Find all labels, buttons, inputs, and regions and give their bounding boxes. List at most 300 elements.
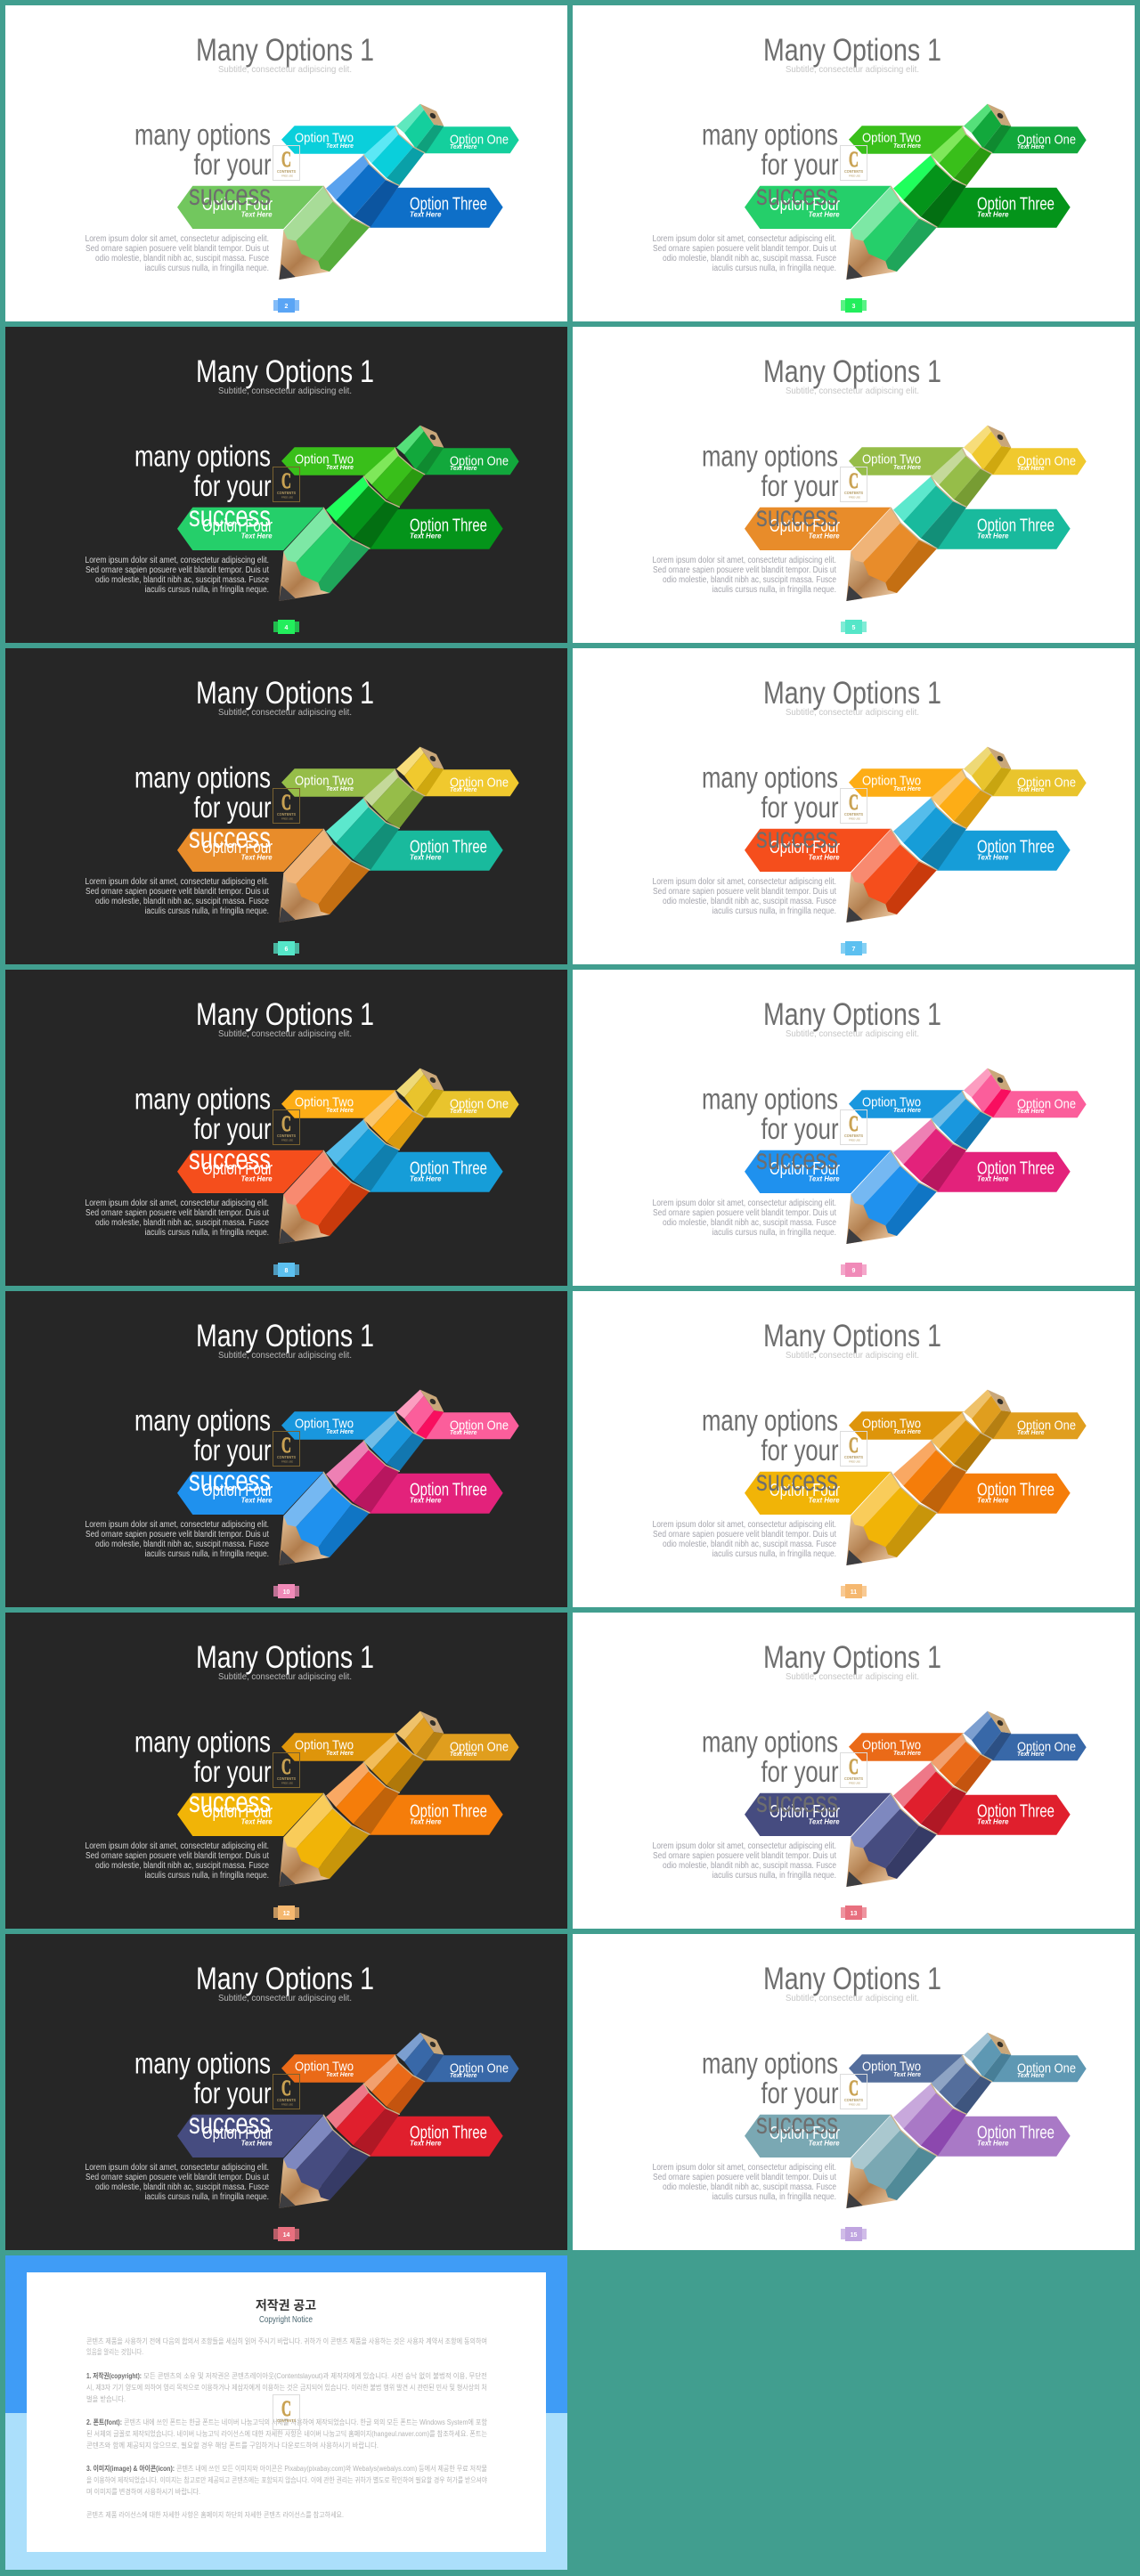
ribbon: option three: Text Here [977,210,1009,219]
ribbon: option four: Text Here [241,1174,273,1183]
ribbon: option three [935,831,1071,871]
section 2: font: 콘텐츠와 함께 제공되지 않으므로, 필요할 경우 해당 폰트를 구입하거나 다운로드하여 사용하시기 바랍니다. [86,2441,379,2450]
ribbon: option two: Text Here [893,1751,921,1757]
heading: for your [194,2076,272,2109]
heading: success [189,178,271,211]
ribbon: option three: Text Here [410,2139,442,2148]
ribbon: option four: Option Four [770,516,840,536]
ribbon: option four: Text Here [241,532,273,540]
page number [273,1906,299,1920]
heading: success [756,178,838,211]
page number [273,298,299,313]
heading: many options [134,1726,271,1758]
section 3: image and icon: 며 이미지를 변경하여 사용하시기 바랍니다. [86,2487,200,2496]
pencil [279,1069,444,1244]
ribbon: option four: Option Four [202,1481,273,1500]
body text: odio molestie, blandit nibh ac, suscipit massa. Fusce [95,1540,269,1549]
ribbon: option four: Text Here [809,2139,840,2148]
heading [702,2046,839,2140]
subtitle: Subtitle, consectetur adipiscing elit. [786,64,919,75]
page number [841,941,867,955]
ribbon: option one [990,1412,1087,1439]
ribbon: option one [423,769,519,796]
watermark [273,1432,299,1466]
body text: Lorem ipsum dolor sit amet, consectetur adipiscing elit. [652,234,836,244]
ribbon: option one: Option One [1017,453,1076,468]
slide 8 [5,970,567,1286]
subtitle: Subtitle, consectetur adipiscing elit. [786,1671,919,1682]
copyright title: 저작권 공고 [256,2298,316,2312]
ribbon: option one: Text Here [450,787,477,793]
slide 15 [573,1934,1135,2250]
ribbon: option two [281,447,396,475]
slide 9 [573,970,1135,1286]
heading: for your [194,469,272,502]
heading [702,760,839,854]
heading [134,1726,272,1818]
ribbon: option four: Text Here [241,210,273,219]
heading: many options [702,440,838,472]
ribbon: option three: Option Three [410,2124,487,2143]
pencil [846,1390,1011,1565]
heading: success [189,500,271,532]
ribbon: option one [423,2055,519,2082]
body text: Lorem ipsum dolor sit amet, consectetur adipiscing elit. [86,2163,269,2173]
subtitle: Subtitle, consectetur adipiscing elit. [218,1993,352,2003]
ribbon: option three: Text Here [410,1174,442,1183]
body text [86,556,269,595]
body text [652,556,836,595]
slide 2 [5,5,567,321]
body text [652,877,836,916]
subtitle: Subtitle, consectetur adipiscing elit. [218,64,352,75]
pencil [279,426,444,601]
intro paragraph: 있음을 알리는 것입니다. [86,2347,143,2356]
title: Many Options 1 [196,354,374,389]
body text [86,1199,269,1238]
ribbon: option one: Option One [1017,1418,1076,1433]
ribbon: option three [368,1152,503,1192]
watermark: C [281,1112,291,1136]
ribbon: option four: Option Four [202,1159,273,1179]
heading: many options [702,760,838,794]
ribbon: option two: Option Two [295,130,354,146]
ribbon: option one: Option One [1017,775,1076,790]
ribbon: option three: Option Three [977,2124,1054,2143]
heading [134,1083,272,1175]
heading [702,1726,839,1818]
ribbon: option two: Option Two [295,2059,354,2075]
watermark [841,467,867,502]
heading: many options [134,118,271,151]
page number [273,941,299,955]
body text: iaculis cursus nulla, in fringilla neque. [712,264,836,273]
page number: 12 [283,1911,289,1917]
watermark [273,1752,299,1788]
watermark [841,2075,867,2109]
page number: 5 [852,625,856,631]
ribbon: option two [281,768,396,797]
body text [86,877,269,916]
white card [27,2272,546,2552]
heading: for your [194,1434,272,1467]
ribbon: option two [849,1411,964,1440]
subtitle: Subtitle, consectetur adipiscing elit. [218,1671,352,1682]
pencil [846,1711,1011,1887]
ribbon: option four: Option Four [770,838,840,857]
watermark: CONTENTS [277,1455,296,1459]
ribbon: option three: Text Here [977,1817,1009,1826]
page number [841,1584,867,1598]
ribbon: option three: Option Three [410,838,487,857]
watermark [841,1432,867,1466]
title: Many Options 1 [196,1640,374,1675]
body text: iaculis cursus nulla, in fringilla neque. [712,585,836,595]
ribbon: option one [423,448,519,475]
heading: success [189,2107,271,2140]
pencil [846,1069,1011,1244]
watermark: FREE USE [281,1460,293,1464]
ribbon: option two [281,1090,396,1118]
title: Many Options 1 [763,676,941,711]
ribbon: option three: Text Here [410,1817,442,1826]
ribbon: option one: Text Here [1017,466,1045,472]
body text: odio molestie, blandit nibh ac, suscipit massa. Fusce [95,254,269,264]
page number [273,1584,299,1598]
heading: many options [134,440,271,472]
section 2: font [86,2418,488,2450]
heading: for your [761,1755,839,1788]
ribbon: option two: Text Here [893,1108,921,1114]
heading: many options [134,2046,271,2080]
ribbon: option four [177,508,323,550]
section 1: copyright [86,2371,487,2403]
body text: iaculis cursus nulla, in fringilla neque. [144,2192,269,2202]
ribbon: option four: Text Here [809,210,840,219]
ribbon: option four: Text Here [241,1817,273,1826]
body text: iaculis cursus nulla, in fringilla neque. [712,1871,836,1881]
body text: Lorem ipsum dolor sit amet, consectetur adipiscing elit. [86,556,269,565]
ribbon: option one: Option One [450,132,509,147]
watermark: FREE USE [281,2103,293,2107]
ribbon: option four: Text Here [809,1174,840,1183]
ribbon: option one: Text Here [450,466,477,472]
heading: for your [761,2076,839,2109]
slide 3 [573,5,1135,321]
ribbon: option one: Text Here [450,144,477,150]
page number [841,1906,867,1920]
ribbon: option two [849,126,964,154]
ribbon: option three [935,1474,1071,1514]
ribbon: option two: Option Two [862,1416,921,1432]
body text [652,234,836,273]
ribbon: option three [368,509,503,549]
page number: 13 [851,1911,857,1917]
title: Many Options 1 [763,1962,941,1996]
ribbon: option four: Text Here [241,853,273,862]
page number: 7 [852,947,856,953]
subtitle: Subtitle, consectetur adipiscing elit. [786,1350,919,1361]
ribbon: option one: Text Here [450,1751,477,1758]
body text: odio molestie, blandit nibh ac, suscipit massa. Fusce [663,2182,836,2192]
page number: 8 [285,1268,289,1274]
ribbon: option four: Option Four [770,1802,840,1822]
ribbon: option two [849,2054,964,2083]
pencil [279,104,444,280]
watermark: C [849,1112,859,1136]
body text: iaculis cursus nulla, in fringilla neque. [144,1549,269,1559]
ribbon: option four: Option Four [770,195,840,215]
watermark [273,2075,299,2109]
ribbon: option two: Option Two [862,130,921,146]
slide 10 [5,1291,567,1607]
watermark [273,1109,299,1145]
ribbon: option two: Text Here [893,143,921,150]
watermark: C [849,1755,859,1779]
ribbon: option two: Option Two [295,773,354,789]
body text: iaculis cursus nulla, in fringilla neque. [144,585,269,595]
body text: Sed ornare sapien posuere velit blandit tempor. Duis ut [86,1530,269,1540]
ribbon: option three: Text Here [410,1496,442,1505]
section 3: image and icon: 3. 이미지(image) & 아이콘(icon): [86,2464,175,2473]
ribbon: option one: Option One [450,453,509,468]
watermark: C [849,469,859,493]
ribbon: option one [990,448,1087,475]
ribbon: option three: Option Three [977,1802,1054,1822]
body text: Sed ornare sapien posuere velit blandit tempor. Duis ut [86,887,269,897]
ribbon: option four [177,2115,323,2158]
ribbon: option three: Text Here [977,1174,1009,1183]
heading: for your [194,791,272,824]
page number [273,620,299,634]
watermark [273,146,299,180]
heading: for your [194,148,272,181]
ribbon: option four [745,1472,891,1515]
ribbon: option four [745,1793,891,1836]
ribbon: option two [849,1733,964,1761]
ribbon: option two: Text Here [893,465,921,471]
ribbon: option two: Text Here [893,786,921,792]
subtitle: Subtitle, consectetur adipiscing elit. [218,707,352,718]
heading: for your [761,1112,839,1145]
ribbon: option three: Option Three [410,516,487,536]
ribbon: option one: Option One [450,1739,509,1754]
heading: for your [761,1434,839,1467]
ribbon: option one: Option One [450,1096,509,1111]
watermark: C [849,2076,859,2101]
ribbon: option four [745,186,891,229]
body text: Lorem ipsum dolor sit amet, consectetur adipiscing elit. [652,2163,836,2173]
watermark: FREE USE [849,817,860,821]
section 1: copyright: 벌을 받습니다. [86,2394,126,2403]
ribbon: option four [177,1150,323,1193]
body text: Sed ornare sapien posuere velit blandit tempor. Duis ut [86,2173,269,2182]
heading: many options [702,118,838,151]
subtitle: Subtitle, consectetur adipiscing elit. [786,1028,919,1039]
section 3: image and icon: 콘텐츠 내에 쓰인 모든 이미지와 아이콘은 Pixabay(pixabay.com)와 Webalys(webalys.com) 등에서 제공한 무료 저작물 [176,2464,487,2473]
ribbon: option two: Text Here [326,143,354,150]
body text: Lorem ipsum dolor sit amet, consectetur adipiscing elit. [86,1841,269,1851]
body text [86,1841,269,1881]
body text: Sed ornare sapien posuere velit blandit tempor. Duis ut [86,1851,269,1861]
heading: success [756,1464,838,1497]
ribbon: option one: Option One [450,775,509,790]
ribbon: option three: Text Here [410,210,442,219]
ribbon: option two: Option Two [862,452,921,467]
page number: 15 [851,2232,857,2239]
body text: Sed ornare sapien posuere velit blandit tempor. Duis ut [653,1208,836,1218]
body text: Lorem ipsum dolor sit amet, consectetur adipiscing elit. [86,1199,269,1208]
pencil [279,1390,444,1565]
slide 11 [573,1291,1135,1607]
ribbon: option four: Text Here [809,853,840,862]
body text: Lorem ipsum dolor sit amet, consectetur adipiscing elit. [86,1520,269,1530]
ribbon: option four [177,829,323,872]
page number: 9 [852,1268,856,1274]
page number: 4 [285,625,289,631]
page number [841,2227,867,2241]
closing note: 콘텐츠 제품 라이선스에 대한 자세한 사항은 홈페이지 하단의 자세한 콘텐츠 라이선스를 참고하세요. [86,2510,344,2519]
title: Many Options 1 [763,33,941,68]
ribbon: option one: Option One [1017,132,1076,147]
heading: success [756,500,838,532]
ribbon: option three: Option Three [977,1159,1054,1179]
ribbon: option two: Text Here [326,1751,354,1757]
slide 14 [5,1934,567,2250]
heading [702,1403,839,1497]
body text: odio molestie, blandit nibh ac, suscipit massa. Fusce [95,2182,269,2192]
title: Many Options 1 [196,997,374,1032]
watermark: CONTENTS [277,812,296,817]
panel: copyright notice [5,2255,567,2570]
ribbon: option two: Option Two [295,1738,354,1752]
ribbon: option two [281,126,396,154]
ribbon: option four: Text Here [241,2139,273,2148]
ribbon: option three: Option Three [977,516,1054,536]
pencil [279,1711,444,1887]
subtitle: Subtitle, consectetur adipiscing elit. [786,1993,919,2003]
watermark [841,146,867,180]
ribbon: option one: Option One [1017,1096,1076,1111]
watermark: FREE USE [849,2103,860,2107]
watermark: C [281,1434,291,1458]
ribbon: option four [177,1472,323,1515]
watermark [273,467,299,502]
body text: Lorem ipsum dolor sit amet, consectetur adipiscing elit. [652,1841,836,1851]
ribbon: option three [368,188,503,228]
title: Many Options 1 [763,1319,941,1353]
ribbon: option four: Option Four [770,1159,840,1179]
watermark: FREE USE [281,1138,293,1142]
ribbon: option one [990,126,1087,153]
watermark: C [281,148,291,172]
ribbon: option one: Text Here [1017,1430,1045,1436]
ribbon: option one: Text Here [1017,787,1045,793]
ribbon: option two: Text Here [326,465,354,471]
ribbon: option one: Text Here [450,2073,477,2079]
ribbon: option four: Text Here [809,1817,840,1826]
heading: for your [761,148,839,181]
watermark: C [849,1434,859,1458]
ribbon: option four [745,829,891,872]
watermark: FREE USE [281,495,293,499]
watermark [273,789,299,823]
ribbon: option three: Option Three [977,1481,1054,1500]
ribbon: option one: Text Here [1017,1109,1045,1115]
watermark: CONTENTS [844,2098,863,2102]
heading [134,760,272,854]
ribbon: option four [745,508,891,550]
ribbon: option four [745,2115,891,2158]
ribbon: option two: Option Two [862,2059,921,2075]
ribbon: option three [935,2117,1071,2157]
slide 12 [5,1613,567,1929]
ribbon: option four: Option Four [770,1481,840,1500]
ribbon: option four: Option Four [202,838,273,857]
heading: success [756,1785,838,1818]
slide 7 [573,648,1135,964]
watermark: FREE USE [849,495,860,499]
title: Many Options 1 [763,354,941,389]
title: Many Options 1 [196,33,374,68]
pencil [279,2033,444,2208]
section 3: image and icon: 을 이용하여 제작되었습니다. 이미지는 참고로만 제공되고 콘텐츠에는 포함되지 않습니다. 이에 관한 권리는 귀하가 별도로 확인하여 필요할 경우 허가를 받으셔야 [86,2475,488,2484]
body text: odio molestie, blandit nibh ac, suscipit massa. Fusce [663,1861,836,1871]
body text: odio molestie, blandit nibh ac, suscipit massa. Fusce [95,1861,269,1871]
ribbon: option one [423,1091,519,1117]
ribbon: option one [990,1091,1087,1117]
body text [86,2163,269,2202]
ribbon: option three: Option Three [977,838,1054,857]
watermark: CONTENTS [844,491,863,495]
body text: Sed ornare sapien posuere velit blandit tempor. Duis ut [653,244,836,254]
ribbon: option three: Text Here [977,853,1009,862]
ribbon: option two [849,447,964,475]
ribbon: option four [177,1793,323,1836]
heading: many options [702,1083,838,1115]
ribbon: option four: Option Four [202,1802,273,1822]
body text: odio molestie, blandit nibh ac, suscipit massa. Fusce [663,1218,836,1228]
heading: for your [194,1112,272,1145]
ribbon: option three: Text Here [977,2139,1009,2148]
ribbon: option one [423,1412,519,1439]
title: Many Options 1 [196,1962,374,1996]
heading: many options [702,1403,838,1437]
watermark: C [849,791,859,815]
title: Many Options 1 [196,676,374,711]
ribbon: option three: Option Three [410,1481,487,1500]
ribbon: option two: Text Here [326,786,354,792]
slide 4 [5,327,567,643]
ribbon: option three [368,1474,503,1514]
section 1: copyright: 모든 콘텐츠의 소유 및 저작권은 콘텐츠레이아웃(Contentslayout)과 제작자에게 있습니다. 사전 승낙 없이 불법적 이용, 무단전 [143,2371,487,2380]
section 2: font: 콘텐츠 내에 쓰인 폰트는 한글 폰트는 네이버 나눔고딕의 서체를 사용하여 제작되었습니다. 한글 외의 모든 폰트는 Windows System에 포함 [124,2418,488,2426]
body text [652,1199,836,1238]
body text: iaculis cursus nulla, in fringilla neque. [144,1228,269,1238]
body text: odio molestie, blandit nibh ac, suscipit massa. Fusce [663,897,836,906]
pencil [846,2033,1011,2208]
watermark: FREE USE [849,175,860,178]
ribbon: option one: Text Here [1017,144,1045,150]
heading [134,118,272,211]
body text: odio molestie, blandit nibh ac, suscipit massa. Fusce [663,254,836,264]
ribbon: option three: Text Here [977,532,1009,540]
body text: odio molestie, blandit nibh ac, suscipit massa. Fusce [95,575,269,585]
page number: 2 [285,304,289,310]
title: Many Options 1 [763,1640,941,1675]
heading: many options [702,1726,838,1758]
ribbon: option four: Text Here [241,1496,273,1505]
